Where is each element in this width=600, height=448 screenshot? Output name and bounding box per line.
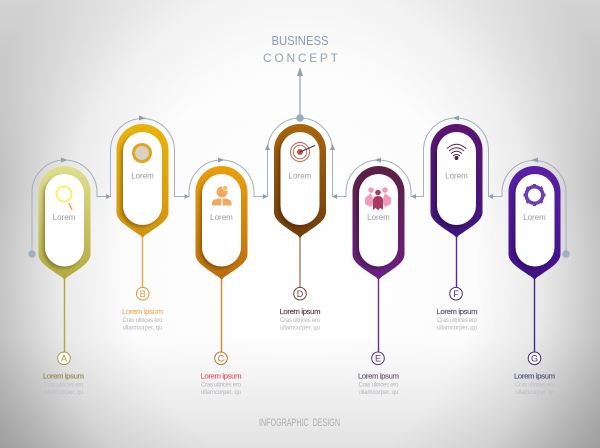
title: CONCEPT — [263, 51, 339, 65]
white inner B — [123, 132, 162, 225]
caption E: Lorem ipsum — [358, 372, 399, 380]
caption C: Lorem ipsum — [200, 372, 242, 380]
start dot left — [28, 250, 36, 258]
stem G — [534, 278, 536, 352]
label E: Lorem — [367, 213, 390, 222]
icon: people — [365, 187, 391, 210]
footer title: INFOGRAPHIC DESIGN — [259, 417, 340, 429]
caption G: Lorem ipsum — [514, 372, 555, 380]
caption B: Cras ultrices ero — [122, 318, 163, 324]
caption C — [200, 372, 242, 396]
caption F: Cras ultrices ero — [437, 318, 478, 324]
icon: magnifier — [56, 186, 72, 210]
badge E — [372, 352, 384, 365]
badge G: G — [531, 354, 538, 364]
badge B: B — [140, 289, 146, 299]
caption F: ullamcorper, qu — [437, 325, 477, 331]
capsule G — [508, 166, 560, 280]
connector path: A to D — [32, 118, 300, 254]
badge G — [528, 352, 541, 365]
badge C — [215, 352, 227, 365]
caption G: ullamcorper, qu — [516, 390, 554, 396]
caption D: Cras ultrices ero — [280, 318, 321, 324]
stem C — [220, 278, 222, 352]
caption A: Cras ultrices ero — [44, 382, 84, 388]
caption A: Lorem ipsum — [43, 372, 84, 380]
caption G — [514, 372, 556, 396]
label D: Lorem — [289, 172, 312, 180]
badge B — [136, 287, 149, 300]
caption B — [122, 307, 163, 331]
white inner E — [359, 174, 398, 266]
caption B: Lorem ipsum — [122, 307, 163, 316]
arrow up to title — [296, 67, 304, 122]
label C: Lorem — [210, 213, 233, 222]
badge E: E — [375, 354, 381, 364]
stem E — [378, 278, 380, 352]
capsule D — [274, 124, 326, 238]
connector path: G to D — [300, 118, 566, 254]
caption G: Cras ultrices ero — [515, 382, 556, 388]
step D — [274, 124, 326, 288]
capsule B — [116, 124, 168, 238]
step G — [508, 166, 560, 352]
caption D: Lorem ipsum — [280, 307, 320, 316]
capsule E — [352, 166, 404, 280]
caption F: Lorem ipsum — [436, 307, 478, 316]
white inner A — [45, 174, 84, 266]
badge C: C — [218, 354, 225, 364]
caption C: ullamcorper, qu — [201, 390, 241, 396]
label B: Lorem — [131, 172, 154, 180]
caption E: Cras ultrices ero — [358, 382, 399, 388]
step F — [430, 124, 482, 288]
badge A: A — [61, 354, 67, 364]
label A: Lorem — [53, 213, 76, 222]
caption A: ullamcorper, qu — [44, 390, 84, 396]
caption A — [43, 372, 84, 396]
icon: target — [290, 142, 315, 162]
connector arrowheads — [61, 116, 538, 199]
caption E: ullamcorper, qu — [358, 390, 398, 396]
icon: wifi — [447, 144, 466, 160]
step A — [38, 166, 90, 352]
capsule F — [430, 124, 482, 238]
stem F — [456, 236, 458, 288]
stem D — [299, 236, 301, 288]
capsule A — [38, 166, 90, 280]
badge D — [294, 287, 306, 300]
white inner G — [516, 174, 554, 266]
badge D: D — [297, 289, 304, 299]
label F: Lorem — [445, 172, 468, 180]
step B — [116, 124, 168, 288]
caption C: Cras ultrices ero — [201, 382, 242, 388]
badge A — [58, 352, 70, 365]
stem B — [142, 236, 144, 288]
capsule C — [196, 166, 248, 280]
step E — [352, 166, 404, 352]
icon: businessman — [212, 186, 232, 206]
caption F — [436, 307, 478, 331]
white inner D — [280, 132, 320, 225]
step C — [196, 166, 248, 352]
badge F: F — [453, 289, 459, 299]
start dot right — [562, 250, 570, 258]
icon: globe — [132, 143, 152, 163]
title: BUSINESS — [272, 34, 328, 48]
caption E — [358, 372, 399, 396]
white inner F — [437, 132, 476, 225]
stem A — [64, 278, 66, 352]
caption D — [280, 307, 321, 331]
caption B: ullamcorper, qu — [122, 325, 162, 331]
white inner C — [202, 174, 241, 266]
badge F — [450, 287, 462, 300]
label G: Lorem — [523, 213, 546, 222]
caption D: ullamcorper, qu — [280, 325, 320, 331]
icon: gear — [524, 184, 546, 206]
title — [263, 34, 339, 65]
